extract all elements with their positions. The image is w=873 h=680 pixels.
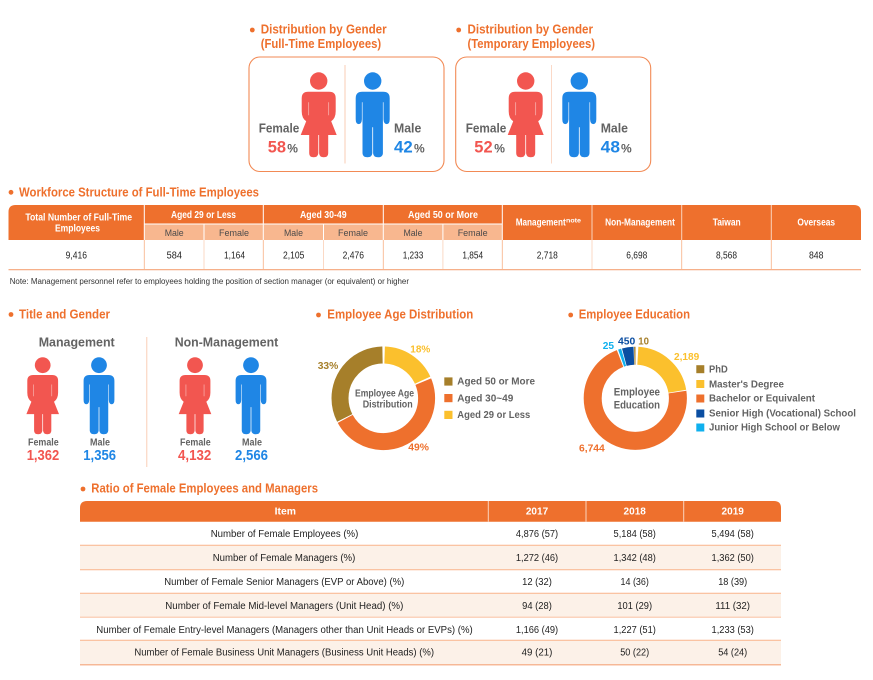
- data row: 8,568: [716, 250, 737, 261]
- row: female entry-level managers: [96, 625, 754, 636]
- header labels: Aged 50 or More: [408, 210, 478, 221]
- non-management male count: 2,566: [235, 448, 268, 464]
- donut chart: age: [340, 355, 427, 442]
- table: ratio of female employees and managers: [80, 501, 781, 665]
- row: female managers: 1,272 (46): [516, 553, 558, 564]
- heading: age distribution: Employee Age Distribution: [327, 308, 473, 322]
- row: female managers: [213, 553, 754, 564]
- donut center label: [355, 389, 414, 410]
- male label: [601, 122, 632, 156]
- management female count: Female: [28, 438, 59, 449]
- divider: [146, 337, 148, 467]
- age subheader background: [144, 224, 502, 240]
- row: female senior managers: 14 (36): [621, 577, 649, 588]
- table header: [80, 501, 781, 522]
- icon: non-management female: [179, 357, 211, 434]
- legend: education: Bachelor or Equivalent: [709, 393, 815, 405]
- subheader labels: Male: [284, 228, 303, 239]
- box outline: [456, 57, 651, 172]
- row: female employees: 4,876 (57): [516, 529, 558, 540]
- icon: female figure: [508, 72, 544, 157]
- panel: gender distribution full-time: [249, 23, 444, 172]
- row: female business unit managers: Number of Female Business Unit Managers (Business Unit Heads) (%): [134, 648, 434, 659]
- donut chart: education: [593, 356, 678, 441]
- row: female employees: Number of Female Employees (%): [211, 529, 358, 540]
- female label: 58: [268, 137, 286, 156]
- row: female business unit managers: 50 (22): [620, 648, 649, 659]
- male label: [394, 122, 425, 156]
- table: workforce structure: [8, 205, 861, 270]
- header labels: Overseas: [797, 218, 835, 229]
- row: female mid-level managers: Number of Female Mid-level Managers (Unit Head) (%): [165, 601, 403, 612]
- donut center label: Employee: [614, 387, 660, 399]
- non-management female count: 4,132: [178, 448, 211, 464]
- row: female employees: 5,184 (58): [614, 529, 656, 540]
- divider: [344, 65, 346, 164]
- icon: male figure: [562, 72, 596, 157]
- donut center label: Employee Age: [355, 389, 414, 400]
- heading: title and gender: Title and Gender: [19, 308, 110, 322]
- icon: male figure: [356, 72, 390, 157]
- heading: full-time gender distribution: [250, 23, 387, 51]
- row: female managers: 1,362 (50): [712, 553, 754, 564]
- legend: age: Aged 50 or More: [457, 376, 535, 388]
- legend: age: Aged 30~49: [457, 392, 513, 404]
- icon: management female: [26, 357, 59, 434]
- table header: 2019: [722, 505, 744, 517]
- data row: 584: [167, 250, 182, 261]
- female label: [259, 122, 299, 156]
- management male count: 1,356: [83, 448, 116, 464]
- donut value labels: 10: [638, 336, 649, 348]
- row: female employees: [211, 529, 754, 540]
- subheader labels: Female: [338, 228, 368, 239]
- donut center label: [614, 387, 660, 411]
- header labels: Employees: [55, 224, 100, 235]
- row: female senior managers: [164, 577, 747, 588]
- row: female managers: 1,342 (48): [614, 553, 656, 564]
- donut center label: Distribution: [363, 399, 413, 410]
- subheader labels: [165, 228, 488, 239]
- data row: [66, 250, 824, 261]
- subheader labels: Female: [219, 228, 249, 239]
- data row: 1,854: [462, 250, 483, 261]
- header labels: Aged 29 or Less: [171, 210, 236, 221]
- male label: Male: [394, 122, 421, 136]
- row: female mid-level managers: 111 (32): [715, 601, 750, 612]
- male label: 48: [601, 137, 620, 156]
- row: female managers: Number of Female Managers (%): [213, 553, 355, 564]
- male label: %: [414, 141, 425, 155]
- table header: 2018: [624, 505, 646, 517]
- header labels: Non-Management: [605, 218, 675, 229]
- donut value labels: 6,744: [579, 443, 605, 455]
- non-management male count: Male: [242, 438, 262, 449]
- row: female business unit managers: 49 (21): [522, 648, 552, 659]
- donut value labels: [318, 344, 431, 454]
- data row: 1,164: [224, 250, 245, 261]
- female label: [466, 122, 506, 156]
- row: female mid-level managers: 94 (28): [522, 601, 552, 612]
- subheader labels: Female: [458, 228, 488, 239]
- donut value labels: 25: [603, 340, 614, 352]
- legend: age: Aged 29 or Less: [457, 409, 530, 421]
- management female count: 1,362: [27, 448, 59, 464]
- male label: %: [621, 141, 632, 155]
- icon: management male: [84, 357, 114, 434]
- donut value labels: 33%: [318, 360, 339, 372]
- subheader labels: Male: [404, 228, 422, 239]
- data row: 9,416: [66, 250, 87, 261]
- icon: female figure: [301, 72, 337, 157]
- management male count: Male: [90, 438, 110, 449]
- data row: 2,718: [537, 250, 558, 261]
- donut value labels: 2,189: [674, 351, 699, 363]
- male label: 42: [394, 137, 413, 156]
- header labels: Management: [516, 218, 566, 229]
- row: female entry-level managers: 1,166 (49): [516, 625, 558, 636]
- data row: 2,105: [283, 250, 305, 261]
- header labels: Taiwan: [713, 218, 741, 229]
- row shading: [80, 546, 781, 664]
- heading: temporary gender distribution: [456, 23, 595, 51]
- row: female senior managers: 18 (39): [718, 577, 747, 588]
- row: female entry-level managers: Number of Female Entry-level Managers (Managers other than Unit Heads or EVPs) (%): [96, 625, 473, 636]
- heading: temporary gender distribution: Distribution by Gender: [468, 23, 593, 37]
- row: female business unit managers: [134, 648, 747, 659]
- panel: employee education: [568, 308, 856, 455]
- panel: title and gender: [9, 308, 279, 467]
- table footnote: Note: Management personnel refer to employees holding the position of section manager (or equivalent) or higher: [10, 277, 409, 286]
- header labels: Total Number of Full-Time: [25, 213, 132, 224]
- legend: education: Master's Degree: [709, 378, 784, 390]
- female label: %: [494, 141, 505, 155]
- legend: education: Senior High (Vocational) School: [709, 408, 856, 420]
- header labels: Aged 30-49: [300, 210, 347, 221]
- female label: 52: [474, 137, 493, 156]
- donut value labels: 18%: [410, 344, 431, 356]
- heading: workforce structure: Workforce Structure of Full-Time Employees: [19, 186, 259, 200]
- row: female mid-level managers: 101 (29): [617, 601, 652, 612]
- data row: 6,698: [626, 250, 648, 261]
- donut value labels: 450: [618, 336, 635, 348]
- data row: 1,233: [403, 250, 424, 261]
- male label: Male: [601, 122, 628, 136]
- legend: education: Junior High School or Below: [709, 422, 841, 434]
- icon: non-management male: [236, 357, 266, 434]
- row: female employees: 5,494 (58): [712, 529, 754, 540]
- data row: 2,476: [343, 250, 364, 261]
- divider: [550, 65, 552, 164]
- heading: full-time gender distribution: Distribution by Gender: [261, 23, 387, 37]
- donut center label: Education: [614, 399, 660, 411]
- heading: temporary gender distribution: (Temporary Employees): [468, 37, 595, 51]
- subheading: non-management: Non-Management: [175, 335, 279, 350]
- table header: Item: [275, 505, 296, 517]
- female label: Female: [466, 122, 506, 136]
- row: female mid-level managers: [165, 601, 750, 612]
- header labels: note: [566, 218, 581, 224]
- heading: ratio of female employees: Ratio of Female Employees and Managers: [91, 482, 318, 496]
- table header background: [8, 205, 861, 240]
- non-management female count: [178, 438, 211, 464]
- subheader labels: Male: [165, 228, 184, 239]
- box outline: [249, 57, 444, 172]
- data row: 848: [809, 250, 824, 261]
- management male count: [83, 438, 116, 464]
- subheading: management: Management: [39, 335, 115, 350]
- legend: education: PhD: [709, 363, 728, 375]
- row: female business unit managers: 54 (24): [718, 648, 747, 659]
- panel: gender distribution temporary: [456, 23, 651, 172]
- management female count: [27, 438, 59, 464]
- header labels: [25, 210, 835, 235]
- row: female senior managers: Number of Female Senior Managers (EVP or Above) (%): [164, 577, 404, 588]
- table header: 2017: [526, 505, 548, 517]
- non-management male count: [235, 438, 268, 464]
- legend: age: [444, 376, 535, 421]
- row: female entry-level managers: 1,233 (53): [712, 625, 754, 636]
- female label: Female: [259, 122, 299, 136]
- panel: employee age distribution: [316, 308, 535, 454]
- non-management female count: Female: [180, 438, 211, 449]
- donut value labels: 49%: [408, 442, 430, 454]
- row: female senior managers: 12 (32): [522, 577, 552, 588]
- female label: %: [287, 141, 298, 155]
- row: female entry-level managers: 1,227 (51): [614, 625, 656, 636]
- legend: education: [696, 363, 856, 434]
- heading: full-time gender distribution: (Full-Time Employees): [261, 37, 381, 51]
- heading: education: Employee Education: [579, 308, 690, 322]
- donut value labels: [579, 336, 699, 455]
